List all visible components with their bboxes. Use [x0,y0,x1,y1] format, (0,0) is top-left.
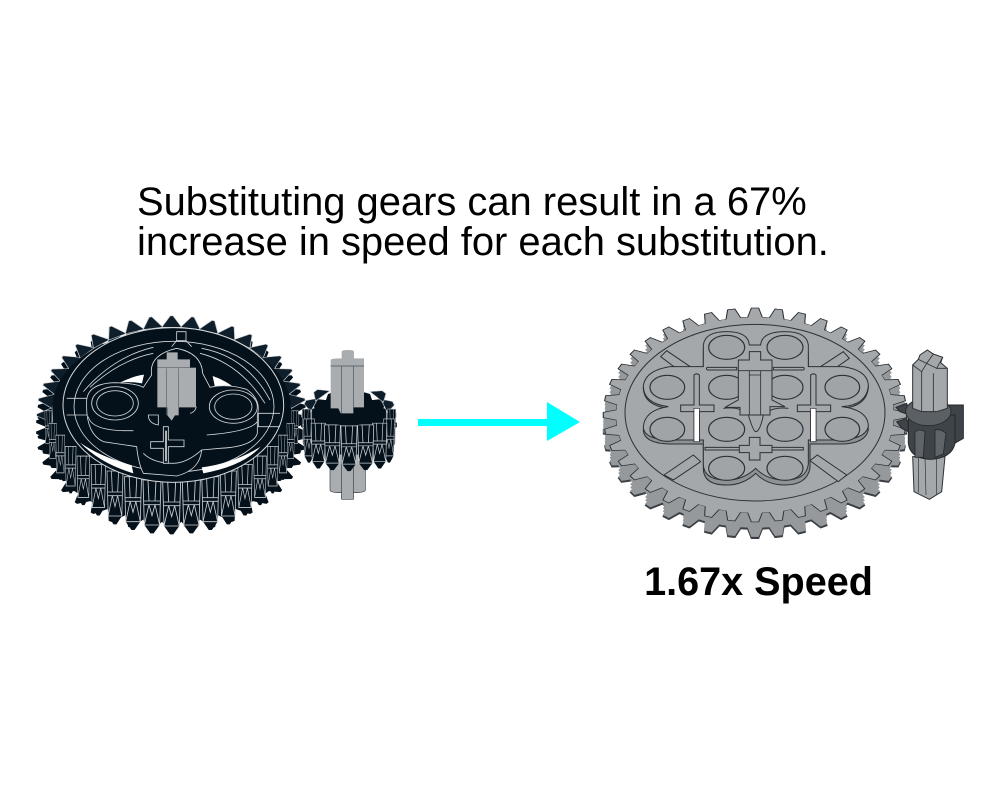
axle in hub [157,352,198,421]
upper teeth [37,316,307,422]
title text: increase in speed for each substitution. [137,220,829,264]
axle upper end [331,350,364,413]
title text: Substituting gears can result in a 67% [137,180,807,224]
lower cross slot [151,427,184,463]
pinion teeth [896,403,963,459]
see-through gaps [80,375,261,473]
inner ring line [625,324,885,501]
title text [137,180,829,264]
axle lower end [913,457,945,499]
lower tooth columns [45,411,298,534]
arrow: cyan right-pointing [418,402,580,441]
cross-shaped hub [87,348,258,476]
hub holes [92,387,257,423]
small gear tooth columns [302,409,396,471]
small dark grey gear with axle [896,350,963,499]
hole plate [643,333,868,485]
axle upper end [913,350,947,412]
large grey gear [603,308,907,539]
center socket and axle mount [723,408,788,432]
spokes [661,351,849,482]
small dark gear with axle [301,350,397,499]
right gear pair: solid grey gears [603,308,963,539]
twelve round holes [650,335,860,480]
speed caption: 1.67x Speed [644,560,873,604]
left gear pair: dark wireframe gears [37,316,397,534]
large dark gear [37,316,307,534]
white slits [694,408,816,442]
slots and crosses [681,367,831,460]
rim lines [63,328,284,482]
axle lower end [330,453,365,499]
